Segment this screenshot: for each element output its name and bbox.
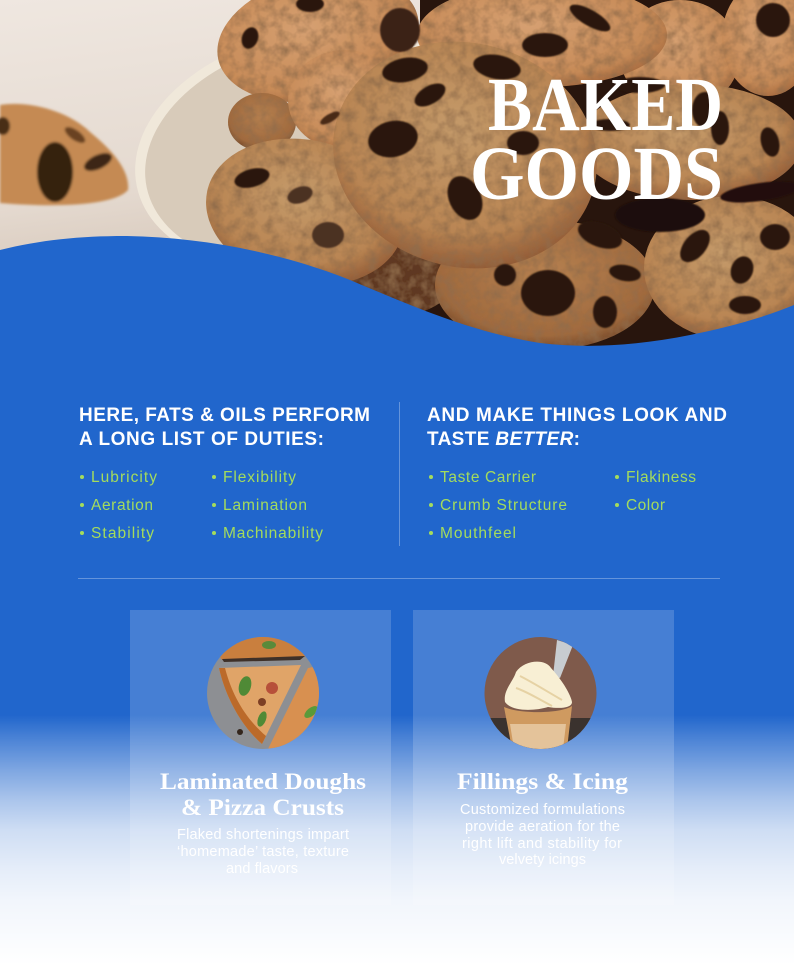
title: BAKED xyxy=(488,63,723,147)
right heading xyxy=(427,405,727,450)
left heading xyxy=(79,405,370,450)
title: GOODS xyxy=(470,132,723,216)
left bullet list: Machinability xyxy=(223,525,323,542)
left bullet list xyxy=(80,469,323,542)
card text: Customized formulations xyxy=(460,802,625,818)
right heading: AND MAKE THINGS LOOK AND xyxy=(427,405,727,426)
panel: fillings and icing xyxy=(413,610,674,867)
right bullet list: Crumb Structure xyxy=(440,497,567,514)
right bullet list: Mouthfeel xyxy=(440,525,516,542)
card title: & Pizza Crusts xyxy=(181,795,344,820)
right bullet list: Color xyxy=(626,497,665,514)
card text: velvety icings xyxy=(499,852,586,868)
card text xyxy=(177,827,349,877)
card text: provide aeration for the xyxy=(465,819,620,835)
card title xyxy=(160,769,366,820)
cookies xyxy=(192,0,794,350)
card title: Laminated Doughs xyxy=(160,769,366,794)
plate xyxy=(112,0,508,302)
card title: Fillings & Icing xyxy=(457,769,629,794)
right heading: TASTE BETTER: xyxy=(427,429,580,450)
panel: laminated doughs and pizza crusts xyxy=(130,610,391,873)
title xyxy=(470,63,723,216)
blurred cookie on table xyxy=(0,104,128,205)
right bullet list xyxy=(429,469,696,542)
card text: right lift and stability for xyxy=(462,836,622,852)
icon: cupcake photo xyxy=(484,637,597,749)
blue wave panel xyxy=(0,236,794,965)
right bullet list: Taste Carrier xyxy=(440,469,536,486)
hero photo: chocolate chip cookies on a plate xyxy=(0,0,794,350)
card text: ‘homemade’ taste, texture xyxy=(177,844,349,860)
left bullet list: Aeration xyxy=(91,497,153,514)
card text xyxy=(460,802,625,868)
card text: Flaked shortenings impart xyxy=(177,827,349,843)
right bullet list: Flakiness xyxy=(626,469,696,486)
left bullet list: Stability xyxy=(91,525,154,542)
left bullet list: Lamination xyxy=(223,497,307,514)
left bullet list: Flexibility xyxy=(223,469,296,486)
left heading: A LONG LIST OF DUTIES: xyxy=(79,429,324,450)
card text: and flavors xyxy=(226,861,298,877)
left bullet list: Lubricity xyxy=(91,469,157,486)
icon: pizza slice photo xyxy=(207,637,320,749)
chocolate chips xyxy=(232,0,794,328)
left heading: HERE, FATS & OILS PERFORM xyxy=(79,405,370,426)
